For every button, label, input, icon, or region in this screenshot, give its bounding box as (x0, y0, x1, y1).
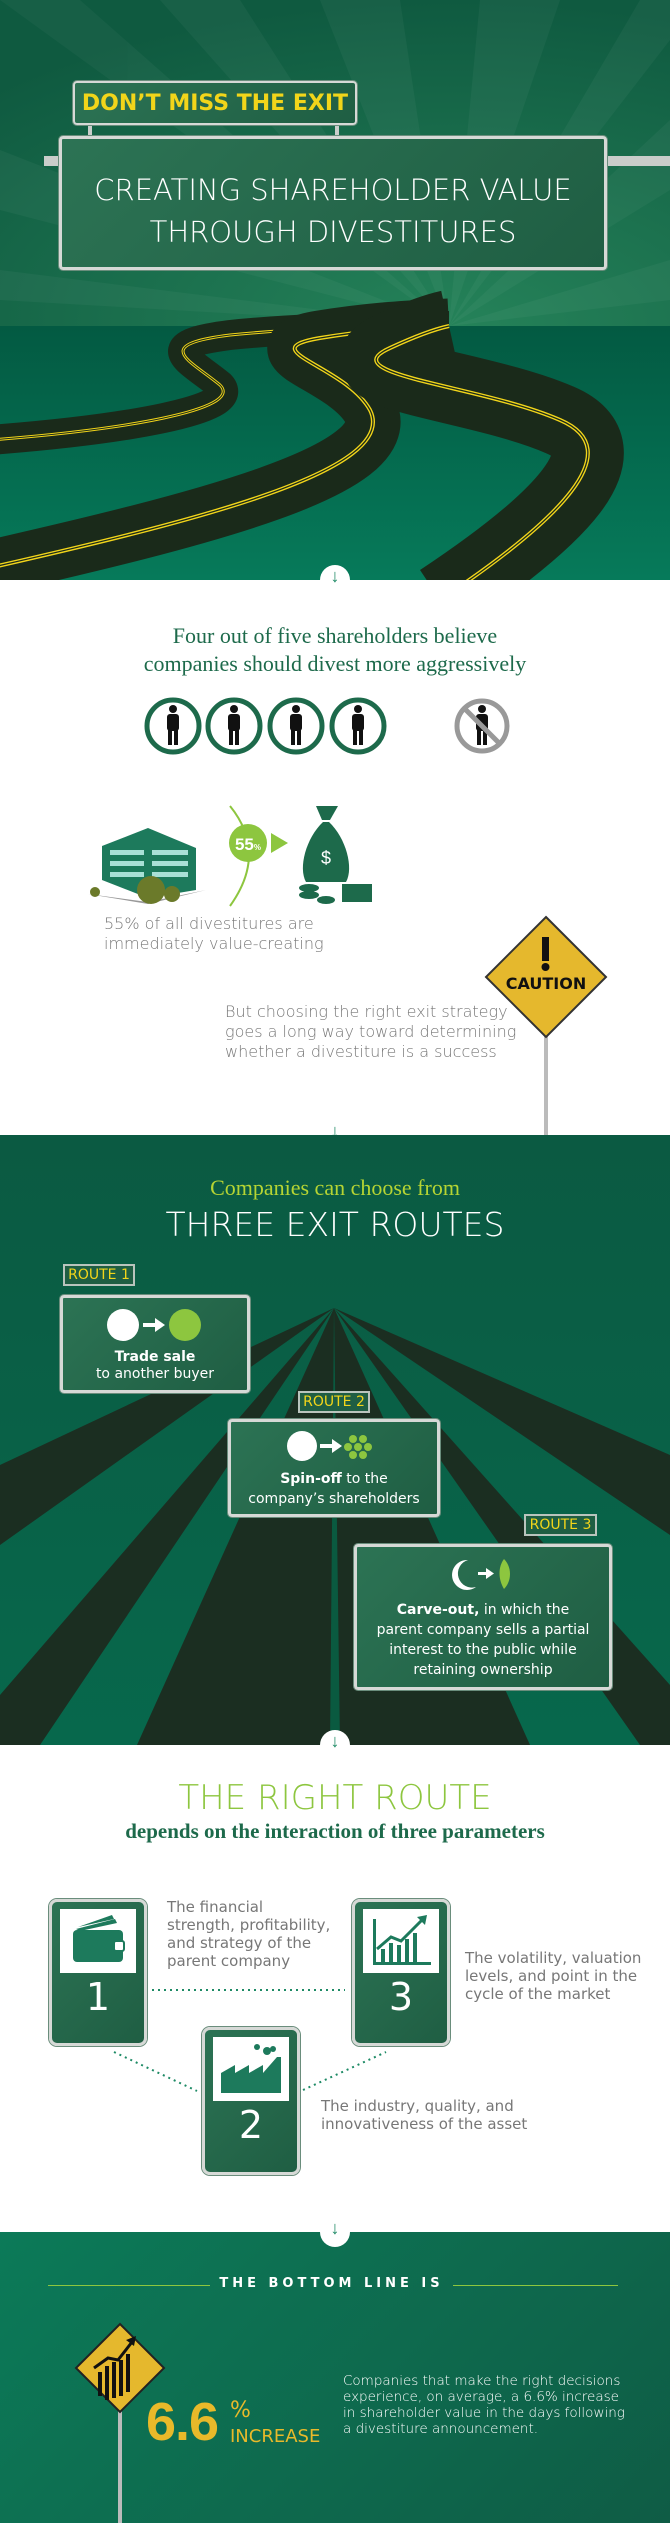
route 2 label (298, 1391, 370, 1413)
param text 1 (166, 1898, 330, 1970)
heading: companies should divest more aggressively (144, 651, 526, 676)
route 3 sign: parent company sells a partial (377, 1622, 589, 1638)
param sign 2 (202, 2027, 300, 2175)
route 2 label: ROUTE 2 (303, 1394, 365, 1410)
heading: Four out of five shareholders believe (173, 623, 497, 648)
stat 6.6%: % (230, 2398, 251, 2423)
bottom text: experience, on average, a 6.6% increase (343, 2389, 619, 2405)
param text 3 (464, 1949, 641, 2003)
stat 6.6%: 6.6 (146, 2392, 218, 2452)
route 3 sign: Carve-out, in which the (397, 1602, 569, 1618)
road 2 (0, 326, 449, 570)
icon: yellow diamond sign (74, 2322, 166, 2523)
param text 3: cycle of the market (465, 1985, 610, 2003)
caution sign: CAUTION (506, 974, 586, 993)
route 2 sign: company’s shareholders (248, 1491, 420, 1507)
sign poles (44, 156, 60, 166)
bottom text: a divestiture announcement. (343, 2421, 538, 2437)
arrow 2 (320, 1120, 350, 1150)
param text 3: The volatility, valuation (465, 1949, 641, 1967)
stat 6.6%: INCREASE (230, 2426, 320, 2447)
route 1 sign: to another buyer (96, 1366, 214, 1382)
param text 2: innovativeness of the asset (321, 2115, 527, 2133)
arrow 1 (320, 565, 350, 595)
subheading: Companies can choose from (210, 1175, 460, 1200)
text: 55%: immediately value-creating (104, 934, 324, 953)
heading: THREE EXIT ROUTES (166, 1205, 504, 1244)
route 3 sign: retaining ownership (413, 1662, 553, 1678)
param text 3: levels, and point in the (465, 1967, 637, 1985)
route 2 sign: Spin-off to the (280, 1471, 388, 1487)
arrow 4 (320, 2217, 350, 2247)
param text 1: and strategy of the (167, 1934, 311, 1952)
text: 55%: 55% of all divestitures are (104, 914, 314, 933)
stat 6.6% (146, 2392, 320, 2452)
section: shareholders (90, 623, 608, 1135)
param sign 2: 2 (239, 2103, 263, 2147)
hero section (0, 0, 670, 580)
55% infographic icons (90, 805, 372, 907)
arrow 2: ↓ (330, 1121, 340, 1141)
caution sign (484, 916, 608, 1135)
text: exit strategy (225, 1002, 516, 1061)
param text 1: The financial (167, 1898, 263, 1916)
route 2 sign (227, 1391, 441, 1518)
heading (144, 623, 526, 676)
bottom text: in shareholder value in the days following (343, 2405, 625, 2421)
subheading: depends on the interaction of three parameters (125, 1819, 545, 1843)
55% infographic icons: 55% (235, 835, 261, 854)
route 3 sign (353, 1514, 613, 1691)
bottom text: Companies that make the right decisions (343, 2373, 620, 2389)
param text 2 (320, 2097, 527, 2133)
road 1 (0, 326, 449, 440)
text: 55% (104, 914, 324, 953)
sign: main title (59, 136, 607, 270)
sign: main title: THROUGH DIVESTITURES (150, 215, 516, 249)
param sign 3 (352, 1899, 450, 2046)
arrow 1: ↓ (330, 566, 340, 586)
section: three exit routes (0, 1135, 670, 1745)
55% infographic icons: $ (321, 848, 331, 868)
route 3 sign: interest to the public while (389, 1642, 577, 1658)
route 1 label: ROUTE 1 (68, 1267, 130, 1283)
people icons (144, 698, 510, 754)
dotted connectors (114, 1989, 386, 2092)
section: bottom line (0, 2232, 670, 2523)
param sign 1 (49, 1899, 147, 2046)
param text 1: strength, profitability, (167, 1916, 330, 1934)
section: right route (48, 1778, 641, 2176)
sign: dont miss the exit (73, 81, 357, 125)
route 1 label (63, 1264, 135, 1286)
arrow 4: ↓ (330, 2218, 340, 2238)
sign: dont miss the exit: DON’T MISS THE EXIT (82, 90, 348, 116)
route 1 sign: Trade sale (115, 1349, 195, 1365)
route 3 label (524, 1514, 597, 1536)
param text 1: parent company (167, 1952, 290, 1970)
bottom text (343, 2373, 625, 2437)
heading: THE RIGHT ROUTE (178, 1778, 492, 1818)
arrow 3 (320, 1730, 350, 1760)
text: exit strategy: goes a long way toward determining (225, 1022, 516, 1041)
sign: main title: CREATING SHAREHOLDER VALUE (94, 173, 572, 207)
route 3 label: ROUTE 3 (530, 1517, 591, 1533)
param text 2: The industry, quality, and (321, 2097, 514, 2115)
text: exit strategy: whether a divestiture is a success (225, 1042, 497, 1061)
param sign 3: 3 (389, 1975, 413, 2019)
route 1 sign (59, 1264, 251, 1394)
arrow 3: ↓ (330, 1731, 340, 1751)
param sign 1: 1 (86, 1975, 110, 2019)
road 3 (376, 326, 588, 600)
text: exit strategy: But choosing the right exit strategy (225, 1002, 508, 1021)
heading with rules: THE BOTTOM LINE IS (219, 2276, 444, 2291)
